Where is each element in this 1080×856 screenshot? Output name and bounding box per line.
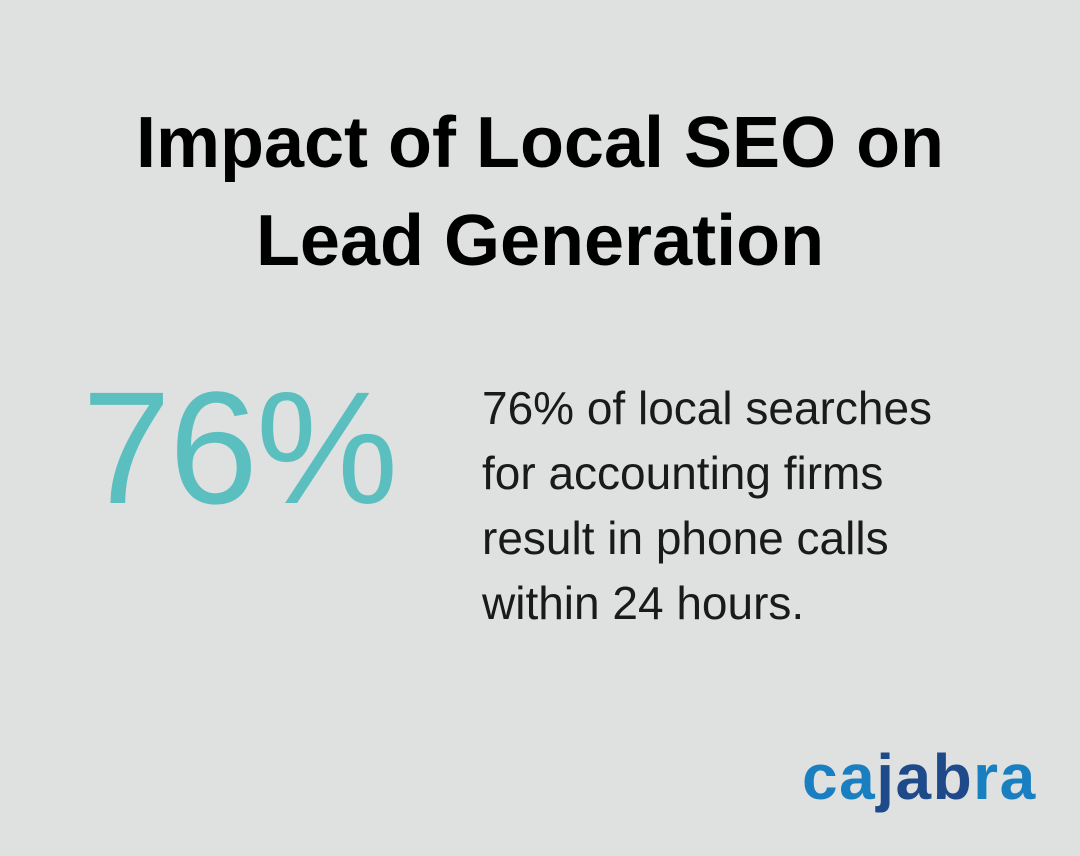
description text: within 24 hours.	[482, 577, 804, 629]
description text: result in phone calls	[482, 512, 889, 564]
logo: cajabra	[802, 741, 1037, 813]
description text: for accounting firms	[482, 447, 883, 499]
description text: 76% of local searches	[482, 382, 932, 434]
description text	[482, 382, 932, 629]
title: Impact of Local SEO on	[136, 103, 944, 183]
title: Lead Generation	[256, 201, 824, 281]
title	[136, 103, 944, 281]
big stat: 76%	[82, 358, 396, 537]
